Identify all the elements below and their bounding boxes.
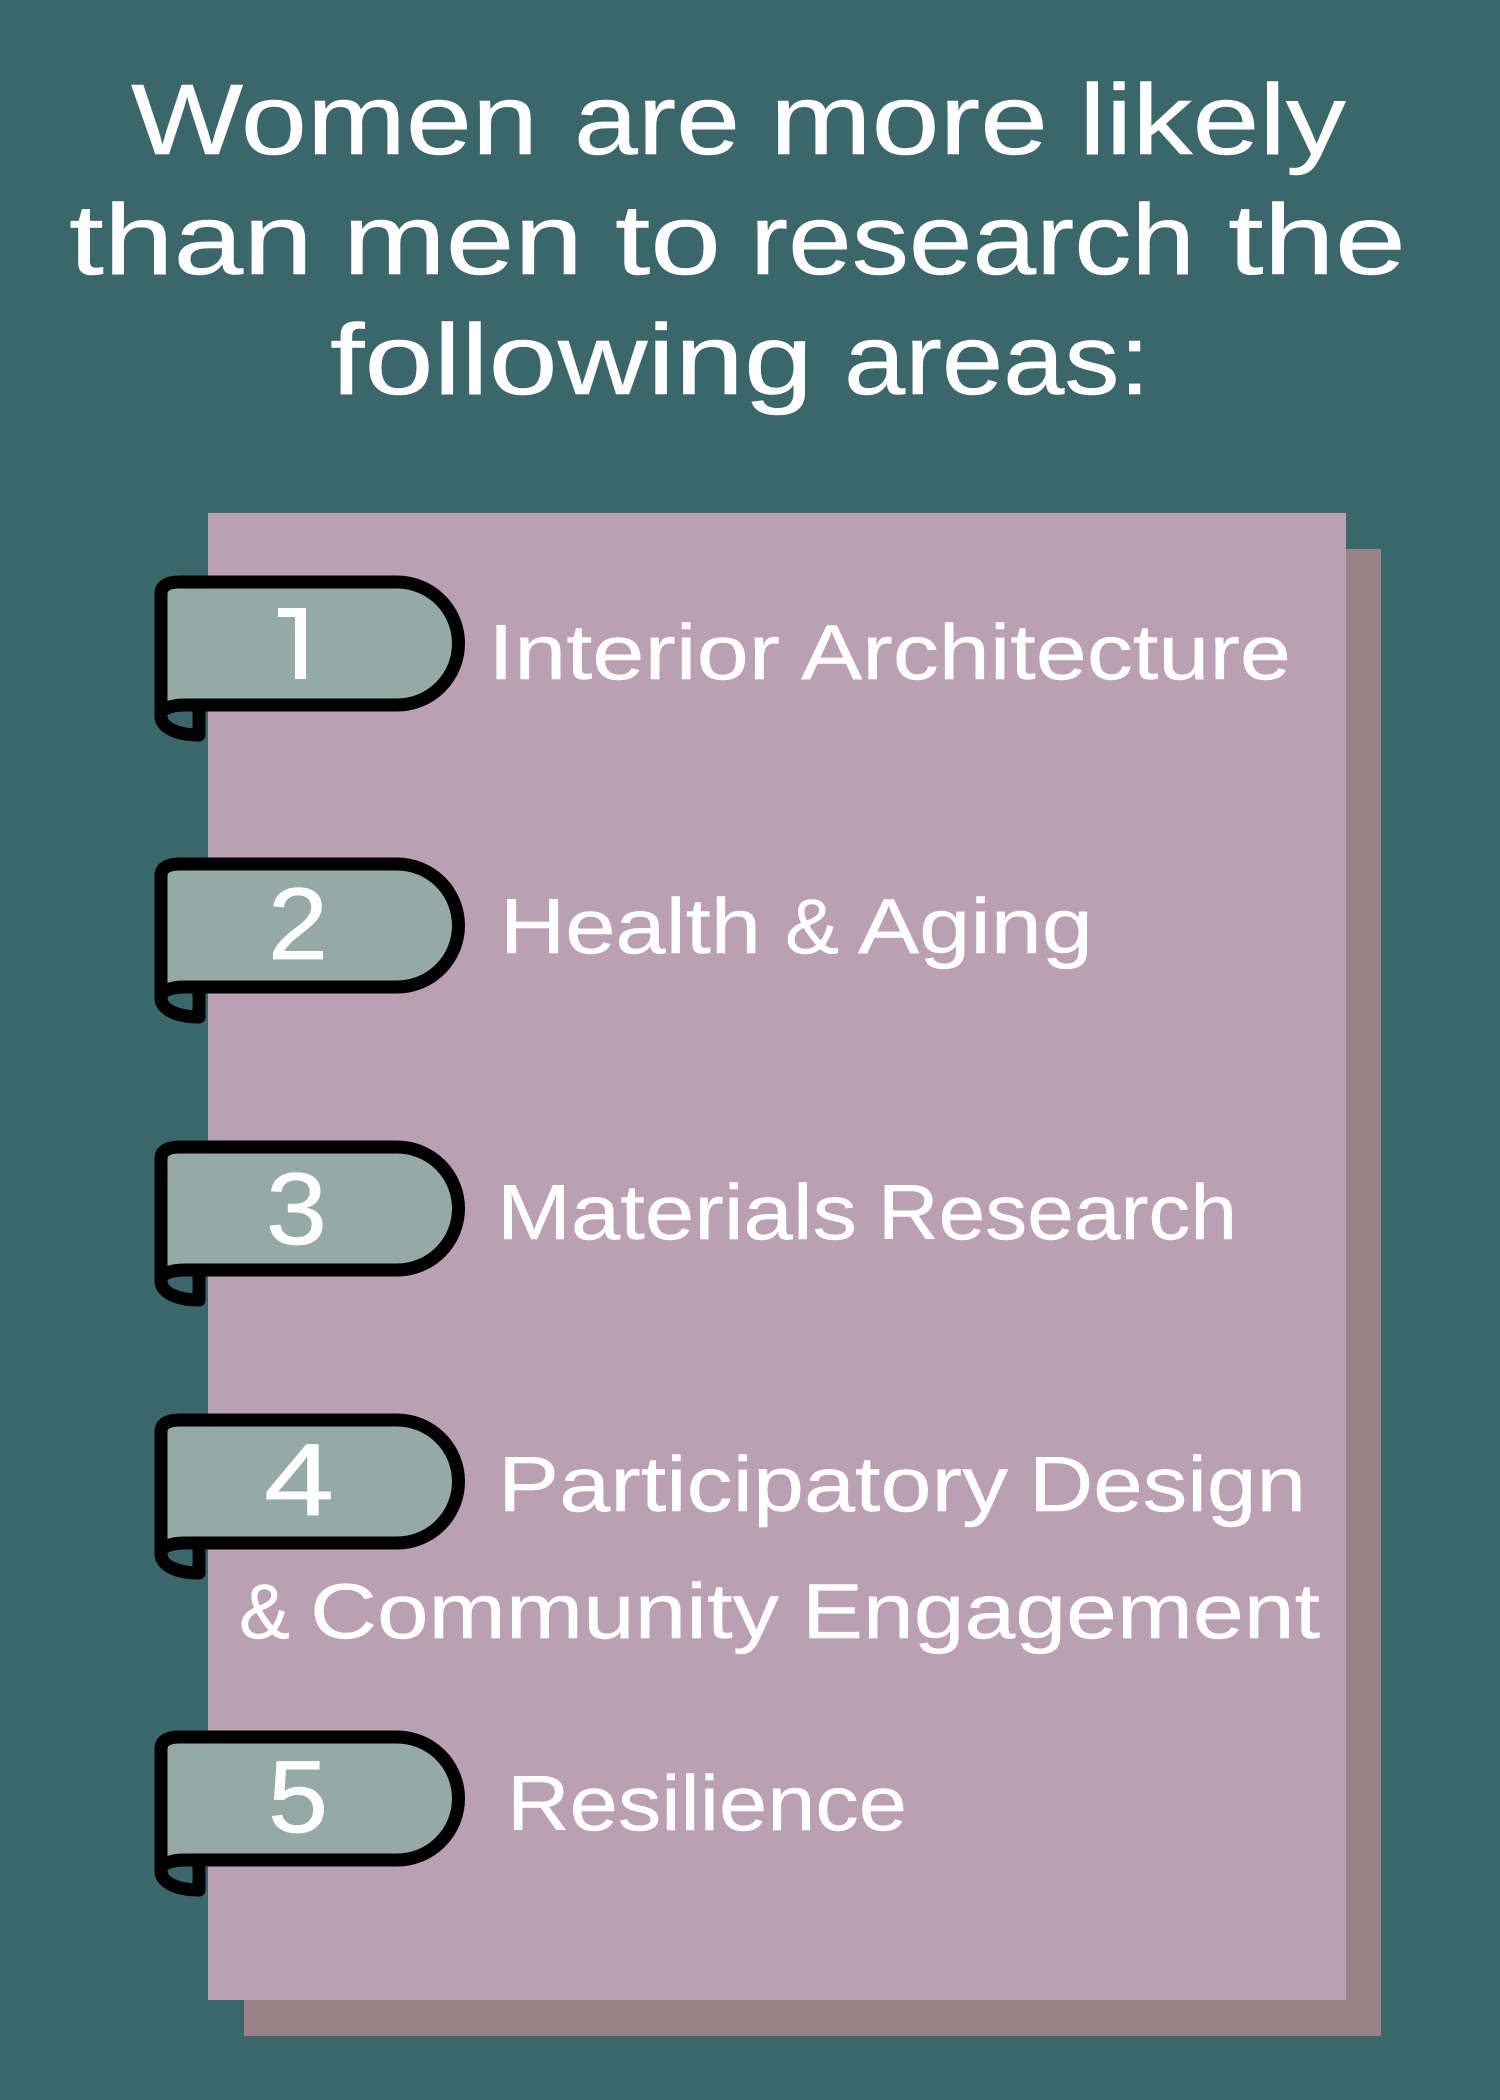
label 2: & (785, 882, 839, 970)
title: more (770, 64, 1048, 176)
ribbon 2: 2 (268, 867, 328, 981)
title (69, 64, 1406, 416)
ribbon 1 (161, 582, 458, 735)
label 4: Engagement (802, 1567, 1320, 1655)
label 4: & (239, 1567, 290, 1655)
title: men (343, 184, 583, 296)
ribbon 3: 3 (266, 1152, 327, 1266)
ribbon 1: 1 (265, 589, 321, 701)
label 1 (488, 608, 1291, 696)
title: likely (1079, 64, 1346, 176)
label 2 (500, 882, 1093, 970)
ribbon 2 (161, 864, 458, 1017)
title: Women (131, 64, 538, 176)
ribbon 4: 4 (264, 1423, 334, 1537)
label 1: Interior (488, 608, 780, 696)
label 3: Research (878, 1168, 1237, 1256)
title: following (330, 304, 813, 416)
panel shadow (244, 549, 1381, 2036)
label 4: Participatory (498, 1440, 1008, 1528)
label 2: Aging (858, 882, 1093, 970)
title: to (615, 184, 721, 296)
ribbon 4 (161, 1420, 458, 1573)
title: the (1228, 184, 1406, 296)
label 3: Materials (497, 1168, 857, 1256)
title: research (750, 184, 1195, 296)
label 2: Health (500, 882, 761, 970)
label 5: Resilience (507, 1759, 907, 1847)
title: are (574, 64, 740, 176)
ribbon 5: 5 (268, 1740, 328, 1854)
label 4 (239, 1440, 1320, 1655)
label 3 (497, 1168, 1237, 1256)
title: areas: (844, 304, 1150, 416)
ribbon 3 (161, 1147, 458, 1300)
title: than (69, 184, 313, 296)
label 1: Architecture (801, 608, 1291, 696)
label 4: Community (310, 1567, 779, 1655)
ribbon 5 (161, 1737, 458, 1890)
label 4: Design (1029, 1440, 1306, 1528)
panel: research areas (208, 513, 1346, 2000)
